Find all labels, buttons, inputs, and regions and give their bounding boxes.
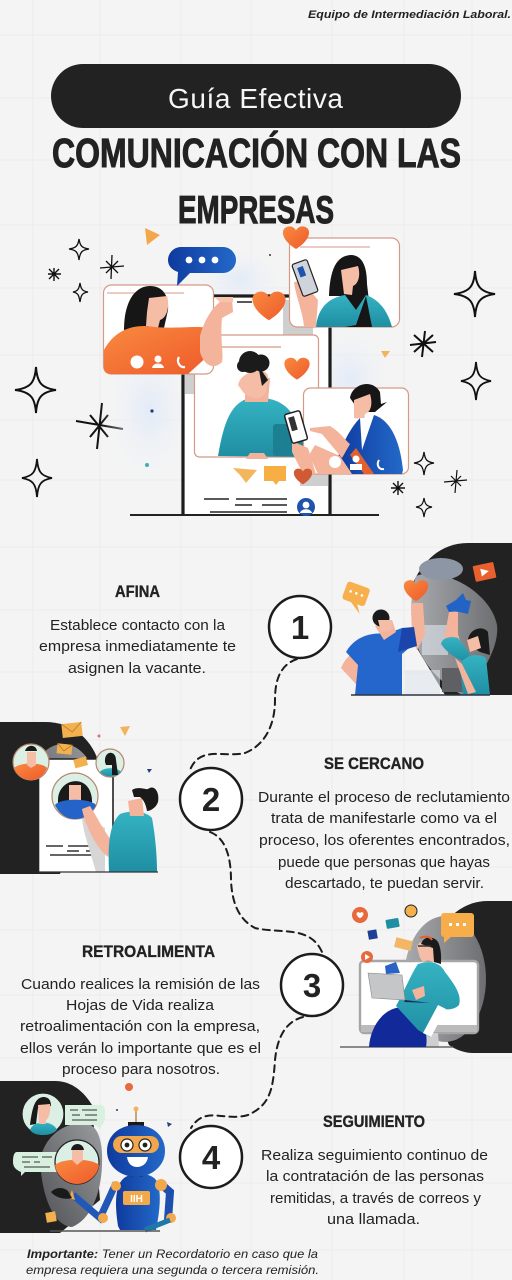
step 1 text: asignen la vacante. <box>68 660 206 677</box>
step 3 illustration <box>340 901 512 1053</box>
speech bubbles <box>13 1105 105 1176</box>
thumb up <box>446 593 471 614</box>
step 4 text: una llamada. <box>327 1211 420 1228</box>
step 2 text: proceso, los oferentes encontrados, <box>259 832 510 849</box>
step 4 text: remitidas, a través de correos y <box>270 1190 481 1207</box>
step 2 text: puede que personas que hayas <box>278 854 490 871</box>
woman from behind <box>82 787 158 872</box>
phone in hand <box>284 410 316 474</box>
step 4 illustration <box>0 1081 176 1233</box>
avatar man <box>55 1140 99 1184</box>
man with heart <box>341 603 425 695</box>
step 3 circle: 3 <box>303 967 321 1004</box>
center card: man <box>194 335 318 459</box>
step 1 circle: 1 <box>291 609 309 646</box>
step 3 text: Hojas de Vida realiza <box>66 997 215 1014</box>
step 3 text: ellos verán lo importante que es el <box>20 1040 261 1057</box>
play card <box>473 562 496 582</box>
profile badge <box>297 498 315 516</box>
left card: woman in orange <box>104 285 233 374</box>
step 4 heading: SEGUIMIENTO <box>323 1112 425 1131</box>
heart <box>404 580 428 601</box>
step 2 circle <box>180 768 242 830</box>
hero illustration: video call on phone <box>100 226 408 516</box>
footer note: Importante: Tener un Recordatorio en caso que la <box>27 1247 318 1261</box>
monitor <box>360 961 478 1047</box>
avatar woman <box>22 1093 64 1135</box>
envelopes <box>57 722 88 768</box>
footer note <box>26 1247 319 1277</box>
connector dashed lines <box>190 659 322 1128</box>
step 1 text <box>39 617 236 677</box>
bottom right card: woman pointing <box>304 384 408 474</box>
small icons in phone <box>233 466 312 485</box>
heading: EMPRESAS <box>178 189 334 232</box>
floating icons <box>352 905 417 974</box>
step 2 text: Durante el proceso de reclutamiento <box>258 789 510 806</box>
robot: IIH <box>130 1194 143 1205</box>
step 1 heading: AFINA <box>115 582 160 601</box>
step 3 text <box>20 976 261 1078</box>
speech bubble blue <box>168 247 236 286</box>
step 4 text: Realiza seguimiento continuo de <box>261 1147 488 1164</box>
step 1 text: Establece contacto con la <box>50 617 226 634</box>
step 4 text: la contratación de las personas <box>266 1168 484 1185</box>
step 2 text: trata de manifestarle como va el <box>271 810 497 827</box>
footer note: empresa requiera una segunda o tercera remisión. <box>26 1263 319 1277</box>
step 3 heading: RETROALIMENTA <box>82 942 215 961</box>
title pill <box>51 64 461 128</box>
sparkles and stars <box>15 239 495 517</box>
step 1 text: empresa inmediatamente te <box>39 638 236 655</box>
credit line: Equipo de Intermediación Laboral. <box>308 9 511 21</box>
top right card: woman with phone <box>290 238 400 327</box>
step 2 illustration <box>0 722 158 874</box>
step 1 circle <box>269 596 331 658</box>
step 4 text <box>261 1147 488 1228</box>
pill text: Guía Efectiva <box>168 83 343 114</box>
step 4 circle <box>180 1126 242 1188</box>
small triangles and dots <box>145 228 390 467</box>
heart center <box>284 358 310 380</box>
step 3 text: Cuando realices la remisión de las <box>21 976 260 993</box>
step 2 heading: SE CERCANO <box>324 754 424 773</box>
paper <box>38 759 114 872</box>
step 3 text: retroalimentación con la empresa, <box>20 1018 260 1035</box>
top heart <box>283 226 309 249</box>
step 1 illustration <box>339 543 512 695</box>
big heart <box>252 292 286 320</box>
chat bubble <box>339 581 371 614</box>
phone <box>130 296 379 515</box>
step 2 circle: 2 <box>202 781 220 818</box>
step 3 text: proceso para nosotros. <box>62 1061 220 1078</box>
chat bubble <box>441 913 474 943</box>
woman with like <box>441 612 490 695</box>
step 4 circle: 4 <box>202 1139 221 1176</box>
woman with laptop <box>368 937 460 1047</box>
robot <box>51 1106 176 1230</box>
step 2 text <box>258 789 510 892</box>
step 2 text: descartado, te puedan servir. <box>285 875 484 892</box>
heading <box>52 130 461 232</box>
avatars <box>13 744 49 780</box>
step 3 circle <box>281 954 343 1016</box>
soft glow <box>100 330 200 490</box>
